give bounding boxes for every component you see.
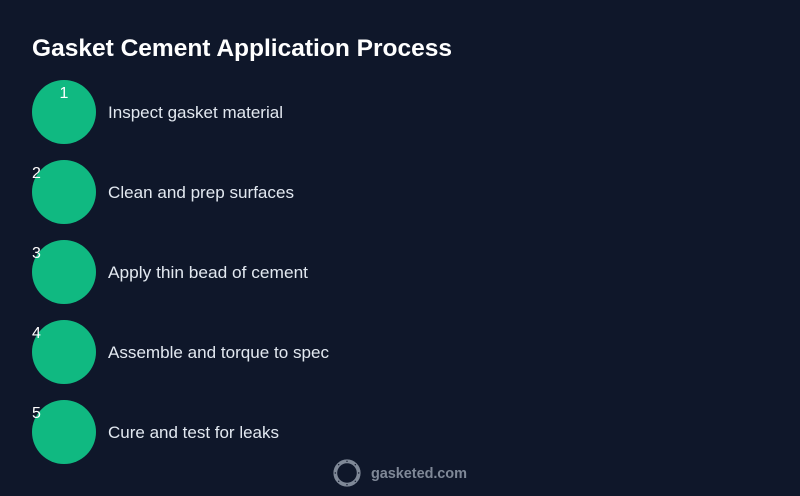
step 4: 4 — [32, 325, 41, 342]
step 1 — [32, 80, 283, 144]
step 3: 3 — [32, 245, 41, 262]
step 3 — [32, 240, 308, 304]
step 4: Assemble and torque to spec — [108, 343, 330, 362]
step 5: 5 — [32, 405, 41, 422]
step 2 — [32, 160, 294, 224]
step 1: 1 — [60, 85, 69, 102]
step 1: Inspect gasket material — [108, 103, 283, 122]
step 3: Apply thin bead of cement — [108, 263, 308, 282]
step 2: 2 — [32, 165, 41, 182]
step 5: Cure and test for leaks — [108, 423, 279, 442]
icon: gasket ring — [333, 459, 361, 487]
step 2: Clean and prep surfaces — [108, 183, 294, 202]
footer logo — [333, 459, 467, 487]
brand name: gasketed.com — [371, 466, 467, 482]
step 4 — [32, 320, 330, 384]
step 5 — [32, 400, 279, 464]
title: Gasket Cement Application Process — [32, 35, 452, 62]
